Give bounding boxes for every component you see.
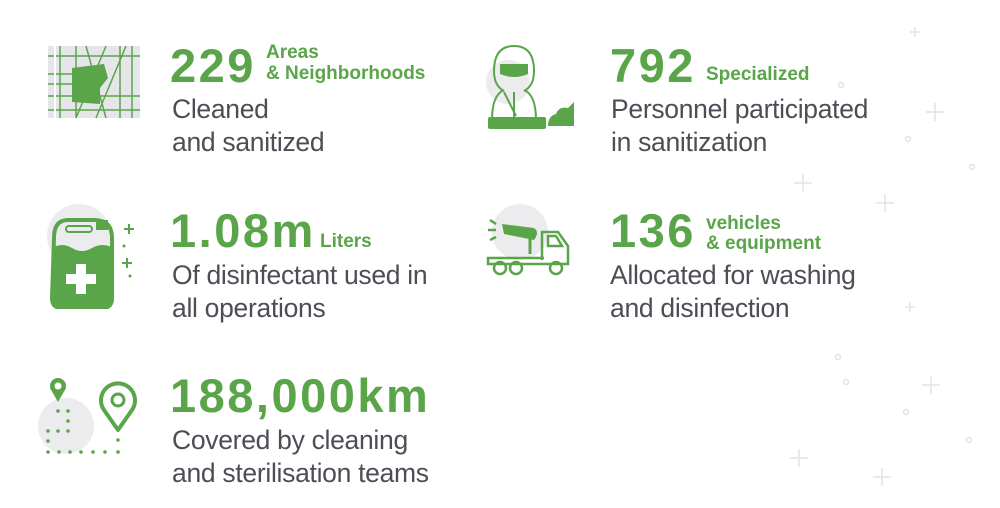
stat: 1.08m liters: all operations	[172, 293, 325, 323]
stat: 136 vehicles: and disinfection	[610, 293, 789, 323]
stat: 1.08m liters: 1.08m	[170, 204, 316, 257]
stat: 229 areas: Areas	[266, 42, 319, 63]
stat: 136 vehicles: 136	[610, 204, 696, 257]
stat: 188,000km: and sterilisation teams	[172, 458, 429, 488]
stat: 136 vehicles: & equipment	[706, 233, 821, 254]
icon: disinfectant canister	[47, 204, 134, 309]
stat: 229 areas: and sanitized	[172, 127, 324, 157]
stat: 136 vehicles	[610, 204, 856, 323]
stat: 188,000km: 188,000km	[170, 369, 430, 422]
icon: protective suit worker	[486, 45, 574, 129]
stat: 188,000km: Covered by cleaning	[172, 425, 408, 455]
icon: disinfection truck	[486, 204, 570, 276]
stat: 229 areas: Cleaned	[172, 94, 269, 124]
stat: 792 personnel: Specialized	[706, 64, 810, 85]
stat: 229 areas: & Neighborhoods	[266, 63, 425, 84]
stat: 229 areas: 229	[170, 39, 256, 92]
stat: 1.08m liters	[170, 204, 427, 323]
stat: 792 personnel: Personnel participated	[611, 94, 868, 124]
stat: 792 personnel: 792	[610, 39, 696, 92]
stat: 136 vehicles: vehicles	[706, 213, 781, 234]
stat: 188,000km	[170, 369, 430, 488]
stat: 792 personnel: in sanitization	[611, 127, 767, 157]
stat: 1.08m liters: Liters	[320, 231, 372, 252]
icon: city map	[48, 46, 140, 118]
icon: route pins	[38, 378, 137, 454]
stat: 229 areas	[170, 39, 425, 157]
stat: 136 vehicles: Allocated for washing	[610, 260, 856, 290]
stat: 1.08m liters: Of disinfectant used in	[172, 260, 427, 290]
stat: 792 personnel	[610, 39, 868, 157]
